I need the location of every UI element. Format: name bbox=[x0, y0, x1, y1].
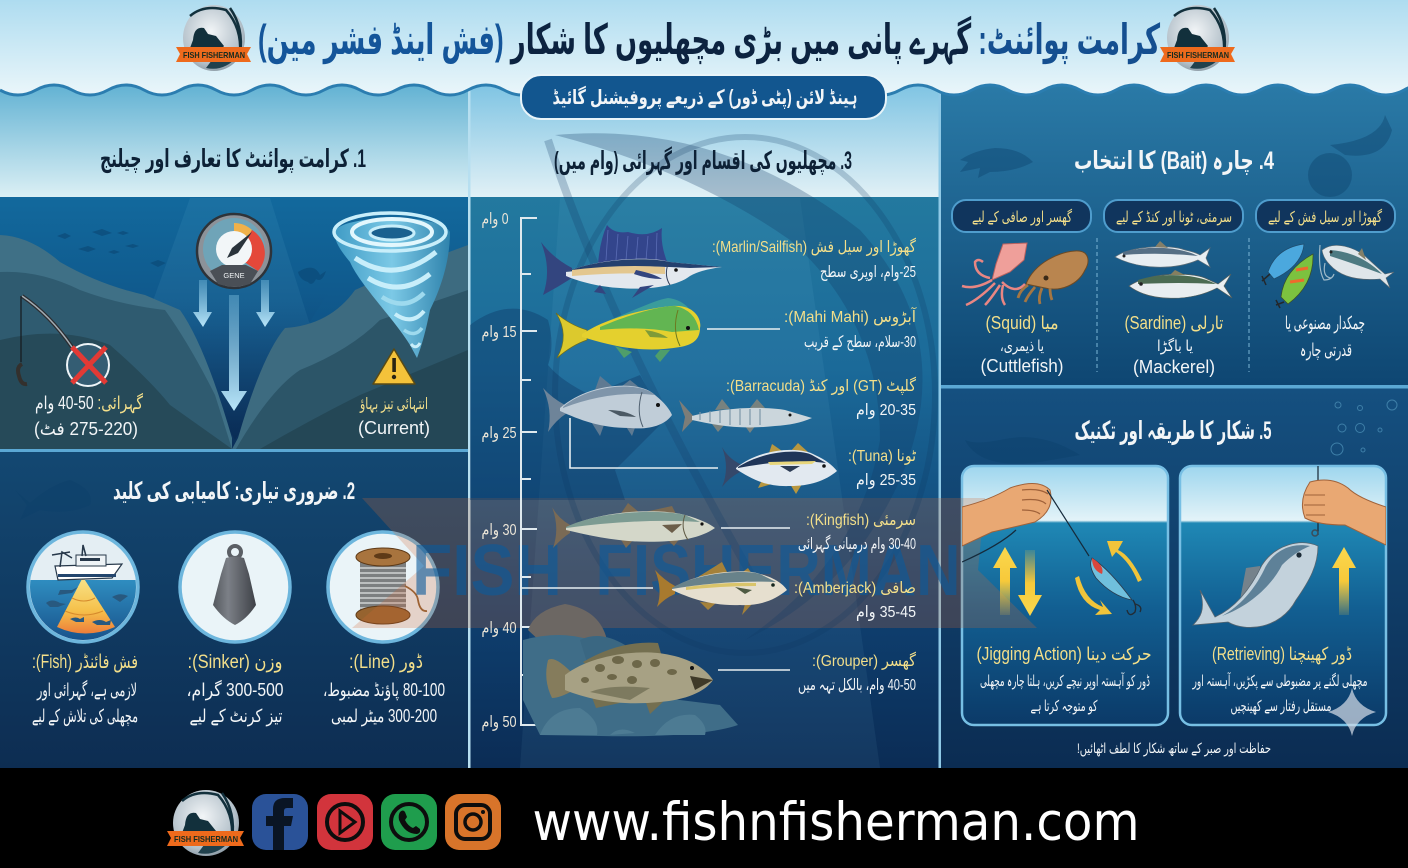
bait text col 2: تارلی (Sardine) bbox=[1124, 313, 1224, 333]
left rock bbox=[0, 235, 232, 449]
jigging text: ڈور کو آہستہ اوپر نیچے کریں، ہلتا چارہ مچھلی bbox=[980, 672, 1150, 691]
line text: 80-100 پاؤنڈ مضبوط، bbox=[323, 680, 445, 701]
panel 1: karamat point intro bbox=[0, 145, 468, 449]
icon: warning triangle bbox=[373, 349, 415, 384]
heading 2: 2. ضروری تیاری: کامیابی کی کلید bbox=[113, 478, 355, 505]
bait text col 2: یا باگڑا bbox=[1157, 337, 1193, 355]
icon: cuttlefish bbox=[1018, 251, 1088, 304]
icon: whatsapp bbox=[381, 794, 437, 850]
bait text col 2 bbox=[1124, 313, 1224, 377]
heading 5: 5. شکار کا طریقہ اور تکنیک bbox=[1074, 417, 1272, 446]
retrieving text: مستقل رفتار سے کھینچیں bbox=[1230, 698, 1332, 715]
species labels: 25-35 وام bbox=[856, 472, 916, 490]
fish: grouper bbox=[546, 643, 713, 714]
rocks bbox=[523, 604, 738, 736]
panel 4: bait selection bbox=[952, 147, 1395, 377]
species labels bbox=[712, 237, 917, 695]
species labels: 40-50 وام، بالکل تہہ میں bbox=[798, 677, 916, 695]
depth label: (275-220 فٹ) bbox=[34, 419, 138, 439]
icon: depth gauge bbox=[197, 214, 271, 288]
current label bbox=[358, 396, 430, 438]
fish finder text: مچھلی کی تلاش کے لیے bbox=[32, 706, 138, 727]
logo left bbox=[176, 5, 251, 71]
species labels: سرمئی (Kingfish): bbox=[806, 512, 916, 530]
depth scale: 50 وام bbox=[482, 714, 517, 732]
bait text col 1: یا ذیمری، bbox=[1000, 338, 1044, 355]
icon: sparkle bbox=[1328, 688, 1376, 736]
sinker text bbox=[186, 652, 284, 727]
section 2 icon circles bbox=[25, 530, 438, 645]
bait text col 3 bbox=[1285, 313, 1365, 360]
species labels: گھوڑا اور سیل فش (Marlin/Sailfish): bbox=[712, 237, 916, 257]
fish: amberjack bbox=[655, 562, 787, 615]
species labels: 30-سلام، سطح کے قریب bbox=[804, 334, 916, 352]
bait text col 3: قدرتی چارہ bbox=[1300, 340, 1352, 360]
retrieving text: ڈور کھینچنا (Retrieving) bbox=[1212, 644, 1352, 665]
current label: انتہائی تیز بہاؤ bbox=[359, 396, 428, 414]
bait text col 1 bbox=[980, 313, 1064, 376]
sinker text: 300-500 گرام، bbox=[186, 679, 284, 701]
sinker text: تیز کرنٹ کے لیے bbox=[190, 706, 282, 727]
depth label bbox=[34, 392, 143, 439]
fish finder text bbox=[32, 652, 138, 727]
panel backgrounds bbox=[0, 85, 1408, 768]
jigging illustration bbox=[962, 483, 1142, 616]
fish: sailfish bbox=[541, 225, 722, 298]
line text: 300-200 میٹر لمبی bbox=[331, 706, 437, 727]
watermark logo: FISH bbox=[412, 531, 562, 611]
heading 1: 1. کرامت پوائنٹ کا تعارف اور چیلنج bbox=[100, 145, 366, 174]
logo left: FISH FISHERMAN bbox=[183, 50, 245, 60]
bubbles bbox=[1331, 400, 1397, 455]
icon: cross mark bbox=[67, 344, 109, 386]
bait pills: سرمئی، ٹونا اور کنڈ کے لیے bbox=[1116, 209, 1232, 226]
depth scale: 30 وام bbox=[482, 522, 517, 540]
bait pills bbox=[952, 200, 1395, 232]
fish: giant trevally bbox=[543, 376, 672, 436]
logo right bbox=[1160, 5, 1235, 71]
icon: facebook bbox=[252, 794, 308, 850]
heading 4: 4. چارہ (Bait) کا انتخاب bbox=[1074, 147, 1274, 175]
depth label: گہرائی: 50-40 وام bbox=[35, 392, 143, 414]
icon: video bbox=[317, 794, 373, 850]
fish: kingfish bbox=[552, 503, 715, 548]
icon: fish finder bbox=[25, 530, 145, 645]
bait pills: گھسر اور صافی کے لیے bbox=[972, 208, 1073, 226]
depth scale: 40 وام bbox=[482, 620, 517, 638]
icon: sardine and mackerel bbox=[1115, 241, 1232, 298]
species labels: 35-45 وام bbox=[856, 604, 916, 622]
panel 5: technique bbox=[962, 400, 1397, 757]
right rock bbox=[232, 245, 468, 449]
watermark logo: FISHERMAN bbox=[596, 531, 960, 611]
logo right: FISH FISHERMAN bbox=[1167, 50, 1229, 60]
current label: (Current) bbox=[358, 418, 430, 438]
species labels: گھسر (Grouper): bbox=[812, 651, 916, 671]
icon: line spool bbox=[328, 532, 438, 642]
technique cards bbox=[962, 466, 1386, 725]
line text bbox=[323, 652, 445, 727]
card: jigging bbox=[962, 466, 1168, 725]
subtitle pill bbox=[521, 75, 886, 119]
bait text col 1: (Cuttlefish) bbox=[980, 356, 1064, 376]
fish finder text: لازمی ہے، گہرائی اور bbox=[36, 679, 137, 701]
header bbox=[0, 0, 1408, 119]
logo footer bbox=[167, 790, 244, 856]
line text: ڈور (Line): bbox=[349, 652, 423, 673]
retrieving text bbox=[1192, 644, 1368, 715]
subtitle pill: ہینڈ لائن (پٹی ڈور) کے ذریعے پروفیشنل گائیڈ bbox=[552, 85, 858, 110]
trench water bbox=[150, 290, 330, 440]
leader lines bbox=[521, 329, 790, 670]
fish: barracuda bbox=[679, 399, 812, 433]
logo footer: FISH FISHERMAN bbox=[174, 834, 238, 844]
species labels: صافی (Amberjack): bbox=[794, 580, 916, 597]
fish finder text: فش فائنڈر (Fish): bbox=[32, 652, 138, 673]
depth scale bbox=[482, 211, 537, 732]
bait text col 2: (Mackerel) bbox=[1133, 357, 1215, 377]
watermark logo bbox=[352, 133, 1037, 653]
fish: mahi mahi bbox=[556, 298, 700, 362]
card: retrieving bbox=[1180, 466, 1386, 725]
species labels: 25-وام، اوپری سطح bbox=[820, 264, 916, 282]
icon: instagram bbox=[445, 794, 501, 850]
species labels: 30-40 وام درمیانی گہرائی bbox=[798, 534, 916, 554]
species labels: ٹونا (Tuna): bbox=[848, 448, 916, 466]
decorative faded fish in right and left panels bbox=[15, 115, 1392, 520]
icon: fishing rod bbox=[18, 296, 72, 384]
title: کرامت پوائنٹ: گہرے پانی میں بڑی مچھلیوں کا شکار (فش اینڈ فشر مین) bbox=[258, 15, 1160, 65]
depth scale: 25 وام bbox=[482, 425, 517, 443]
jigging text: کو متوجہ کرتا ہے bbox=[1030, 698, 1098, 715]
icon: sinker bbox=[180, 532, 290, 642]
fish: tuna bbox=[722, 443, 837, 494]
depth scale: 15 وام bbox=[482, 324, 517, 342]
closing note: حفاظت اور صبر کے ساتھ شکار کا لطف اٹھائیں! bbox=[1077, 740, 1271, 757]
icon: lures bbox=[1262, 244, 1394, 308]
heading 3: 3. مچھلیوں کی اقسام اور گہرائی (وام میں) bbox=[554, 146, 852, 176]
background fish bbox=[57, 229, 326, 284]
bait text col 1: میا (Squid) bbox=[986, 313, 1058, 333]
arrows down bbox=[193, 280, 275, 411]
website url: www.fishnfisherman.com bbox=[532, 792, 1140, 853]
icon: squid bbox=[962, 243, 1027, 305]
icon: whirlpool current bbox=[334, 213, 450, 358]
species labels: آبڑوس (Mahi Mahi): bbox=[784, 307, 917, 327]
panel 3: fish species and depth bbox=[482, 146, 917, 736]
species labels: 20-35 وام bbox=[856, 402, 916, 420]
retrieving illustration bbox=[1193, 465, 1386, 627]
jigging text: حرکت دینا (Jigging Action) bbox=[977, 644, 1152, 665]
jigging text bbox=[977, 644, 1152, 715]
icon: depth gauge: GENE bbox=[223, 271, 245, 280]
sinker text: وزن (Sinker): bbox=[188, 652, 282, 673]
panel 2: essentials bbox=[32, 478, 445, 727]
depth scale: 0 وام bbox=[482, 211, 509, 229]
species labels: گلپٹ (GT) اور کنڈ (Barracuda): bbox=[726, 376, 916, 396]
footer band bbox=[0, 768, 1408, 868]
header band bbox=[0, 0, 1408, 95]
